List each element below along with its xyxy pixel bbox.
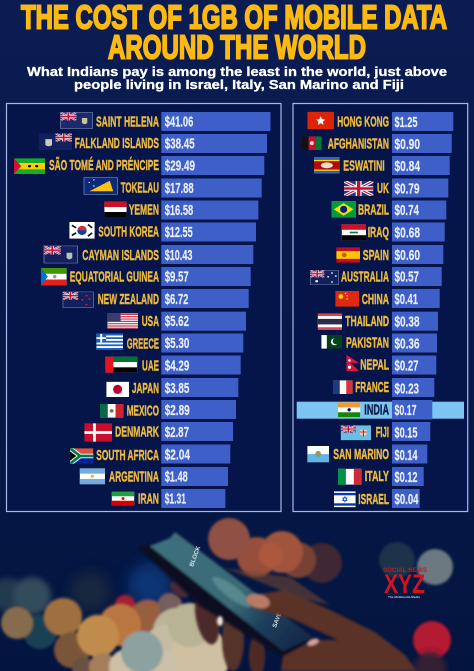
row: Equatorial Guinea: $9.57 — [165, 270, 189, 286]
row: Japan: JAPAN — [132, 381, 159, 397]
row: Pakistan — [321, 334, 437, 352]
flag: Spain — [336, 247, 360, 263]
highlight band: India — [297, 402, 464, 419]
row: Cayman Islands: CAYMAN ISLANDS — [82, 248, 159, 264]
flag: China — [335, 291, 359, 307]
flag: Italy — [338, 468, 362, 485]
row: Greece: $5.30 — [165, 336, 189, 352]
row: France: FRANCE — [355, 380, 389, 396]
row: Spain: SPAIN — [363, 248, 389, 264]
row: UK: UK — [377, 181, 389, 197]
row: Spain: $0.60 — [394, 248, 420, 264]
row: Eswatini — [314, 156, 450, 175]
row: San Marino: SAN MARINO — [333, 447, 389, 463]
flag: Fiji — [340, 425, 371, 440]
row: Italy — [338, 467, 424, 486]
flag: Nepal — [346, 355, 359, 371]
flag: Mexico — [100, 404, 124, 418]
row: Saint Helena: SAINT HELENA — [96, 114, 159, 130]
flag: Falkland Islands — [39, 133, 72, 150]
row: Mexico: MEXICO — [127, 404, 159, 420]
flag: South Africa — [70, 448, 94, 464]
row: Saint Helena: $41.06 — [165, 114, 193, 130]
row: Equatorial Guinea: EQUATORIAL GUINEA — [70, 270, 159, 286]
row: New Zealand — [63, 289, 249, 308]
row: Denmark: DENMARK — [115, 424, 159, 440]
row: Iraq: $0.68 — [394, 226, 420, 242]
fingers behind phone — [167, 577, 265, 671]
row: Cayman Islands — [44, 245, 253, 264]
flag: Pakistan — [321, 335, 342, 349]
row: Nepal: $0.27 — [394, 358, 418, 374]
phone screen text: SAVE — [272, 612, 283, 629]
row: Mexico — [100, 400, 236, 420]
row: Tokelau: $17.88 — [165, 181, 194, 197]
row: Falkland Islands: FALKLAND ISLANDS — [75, 136, 159, 152]
row: Greece: GREECE — [127, 336, 159, 352]
flag: Eswatini — [314, 157, 340, 174]
row: Italy: $0.12 — [394, 470, 418, 486]
row: Japan — [106, 378, 238, 397]
flag: India — [338, 402, 360, 418]
row: Iraq: IRAQ — [368, 225, 389, 241]
flag: Afghanistan — [302, 136, 322, 150]
flag: San Marino — [307, 446, 329, 462]
row: Afghanistan: $0.90 — [394, 137, 420, 153]
row: Denmark: $2.87 — [165, 425, 189, 441]
bokeh lights — [0, 518, 453, 671]
row: Tokelau — [84, 177, 262, 198]
row: China: $0.41 — [394, 292, 418, 308]
flag: Hong Kong — [307, 112, 334, 130]
row: Argentina: ARGENTINA — [109, 470, 159, 486]
flag: Denmark — [84, 423, 112, 442]
flag: Equatorial Guinea — [41, 268, 67, 286]
title: AROUND THE WORLD — [108, 30, 366, 66]
flag: Israel — [334, 491, 356, 508]
row: Australia: $0.57 — [394, 270, 419, 286]
row: Saint Helena — [60, 112, 270, 131]
row: South Africa: SOUTH AFRICA — [96, 448, 159, 464]
row: Equatorial Guinea — [41, 267, 251, 286]
row: South Korea — [69, 222, 256, 242]
row: Australia — [310, 267, 442, 286]
row: Hong Kong: $1.25 — [394, 115, 418, 131]
row: Brazil — [331, 200, 446, 220]
row: India: $0.17 — [394, 403, 416, 419]
flag: Tokelau — [84, 177, 118, 195]
row: Eswatini: ESWATINI — [343, 158, 385, 174]
row: Fiji: $0.15 — [394, 426, 418, 442]
title — [21, 0, 447, 66]
row: Fiji — [341, 422, 430, 442]
row: San Marino — [307, 444, 427, 464]
photo: hand holding a phone against city bokeh — [0, 518, 453, 671]
row: Afghanistan: AFGHANISTAN — [328, 136, 389, 152]
flag: New Zealand — [62, 292, 94, 308]
row: USA — [107, 312, 246, 331]
row: Cayman Islands: $10.43 — [165, 248, 192, 264]
row: Japan: $3.85 — [165, 381, 189, 397]
flag: Cayman Islands — [44, 246, 78, 264]
panel: least expensive countries — [293, 104, 468, 512]
row: Argentina: $1.48 — [165, 470, 188, 486]
row: Brazil: $0.74 — [394, 203, 420, 219]
row: Thailand: $0.38 — [394, 314, 420, 330]
row: UAE: $4.29 — [165, 358, 189, 374]
flag: USA — [107, 313, 138, 329]
row: USA: USA — [142, 314, 159, 330]
flag: Greece — [96, 334, 123, 350]
row: UK — [344, 178, 448, 198]
row: Eswatini: $0.84 — [394, 159, 421, 175]
flag: South Korea — [69, 222, 95, 239]
row: India: INDIA — [364, 402, 389, 418]
flag: Iraq — [342, 224, 366, 241]
flag: Japan — [106, 382, 129, 397]
row: Yemen — [104, 200, 258, 220]
hand — [217, 568, 417, 671]
row: Nepal — [346, 355, 436, 374]
flag: France — [333, 380, 353, 394]
row: Pakistan: PAKISTAN — [346, 336, 389, 352]
flag: Sao Tome and Principe — [14, 158, 45, 174]
row: Nepal: NEPAL — [360, 358, 389, 374]
row: Iraq — [342, 222, 445, 242]
phone screen text — [189, 545, 283, 629]
row: Thailand — [318, 312, 438, 331]
row: France — [333, 378, 434, 398]
flag: UK — [344, 181, 374, 196]
row: Israel: $0.04 — [394, 492, 419, 508]
row: Thailand: THAILAND — [345, 314, 389, 330]
phone screen text: BLOCK — [189, 545, 202, 568]
row: Yemen: YEMEN — [129, 202, 159, 218]
row: USA: $5.62 — [165, 314, 189, 330]
flag: Thailand — [318, 313, 342, 330]
row: Greece — [96, 334, 243, 352]
row: South Korea: SOUTH KOREA — [98, 224, 159, 240]
row: China: CHINA — [362, 292, 389, 308]
watermark logo: XYZ — [384, 569, 425, 599]
row: Fiji: FIJI — [376, 425, 389, 441]
row: Hong Kong — [307, 112, 453, 131]
flag: Australia — [310, 270, 339, 285]
row: UK: $0.79 — [394, 182, 420, 198]
flag: Yemen — [104, 202, 127, 217]
row: Sao Tome and Principe — [14, 156, 264, 175]
row: South Africa: $2.04 — [165, 448, 191, 464]
row: Sao Tome and Principe: $29.49 — [165, 158, 195, 174]
row: San Marino: $0.14 — [394, 448, 418, 464]
flag: Brazil — [331, 201, 356, 218]
row: Iran — [112, 489, 225, 508]
flag: Argentina — [80, 468, 105, 484]
row: Tokelau: TOKELAU — [121, 180, 159, 196]
subtitle — [27, 65, 447, 92]
row: Afghanistan — [302, 134, 452, 153]
flag: Saint Helena — [60, 112, 93, 129]
row: Hong Kong: HONG KONG — [337, 114, 389, 130]
flag: UAE — [105, 356, 138, 373]
row: South Africa — [70, 444, 230, 464]
row: Iran: $1.31 — [165, 492, 186, 508]
row: Yemen: $16.58 — [165, 203, 193, 219]
row: Brazil: BRAZIL — [358, 202, 389, 218]
row: India — [338, 400, 432, 420]
panel: most expensive countries — [6, 104, 281, 512]
row: UAE — [105, 356, 241, 374]
row: China — [335, 289, 440, 308]
row: New Zealand: $6.72 — [165, 292, 188, 308]
row: France: $0.23 — [394, 382, 419, 398]
row: Pakistan: $0.36 — [394, 336, 420, 352]
row: Sao Tome and Principe: SÃO TOMÉ AND PRÉNCIPE — [49, 156, 159, 174]
row: Falkland Islands: $38.45 — [165, 136, 195, 152]
row: Spain — [336, 245, 443, 264]
watermark logo: SOCIAL NEWS — [383, 568, 427, 574]
row: Israel: ISRAEL — [358, 492, 389, 508]
phone — [139, 532, 314, 658]
row: Israel — [334, 489, 420, 508]
row: South Korea: $12.55 — [165, 225, 193, 241]
subtitle: What Indians pay is among the least in the world, just above — [27, 65, 447, 79]
subtitle: people living in Israel, Italy, San Marino and Fiji — [74, 78, 404, 92]
row: Falkland Islands — [39, 133, 267, 153]
row: Denmark — [84, 422, 233, 442]
row: New Zealand: NEW ZEALAND — [98, 292, 159, 308]
row: Argentina — [80, 467, 228, 486]
row: Italy: ITALY — [365, 469, 389, 485]
row: Australia: AUSTRALIA — [341, 270, 389, 286]
row: Mexico: $2.89 — [165, 403, 190, 419]
row: Iran: IRAN — [138, 492, 159, 508]
flag: Iran — [112, 492, 134, 506]
row: UAE: UAE — [142, 358, 159, 374]
watermark logo: The Multimedia Media — [388, 595, 420, 599]
